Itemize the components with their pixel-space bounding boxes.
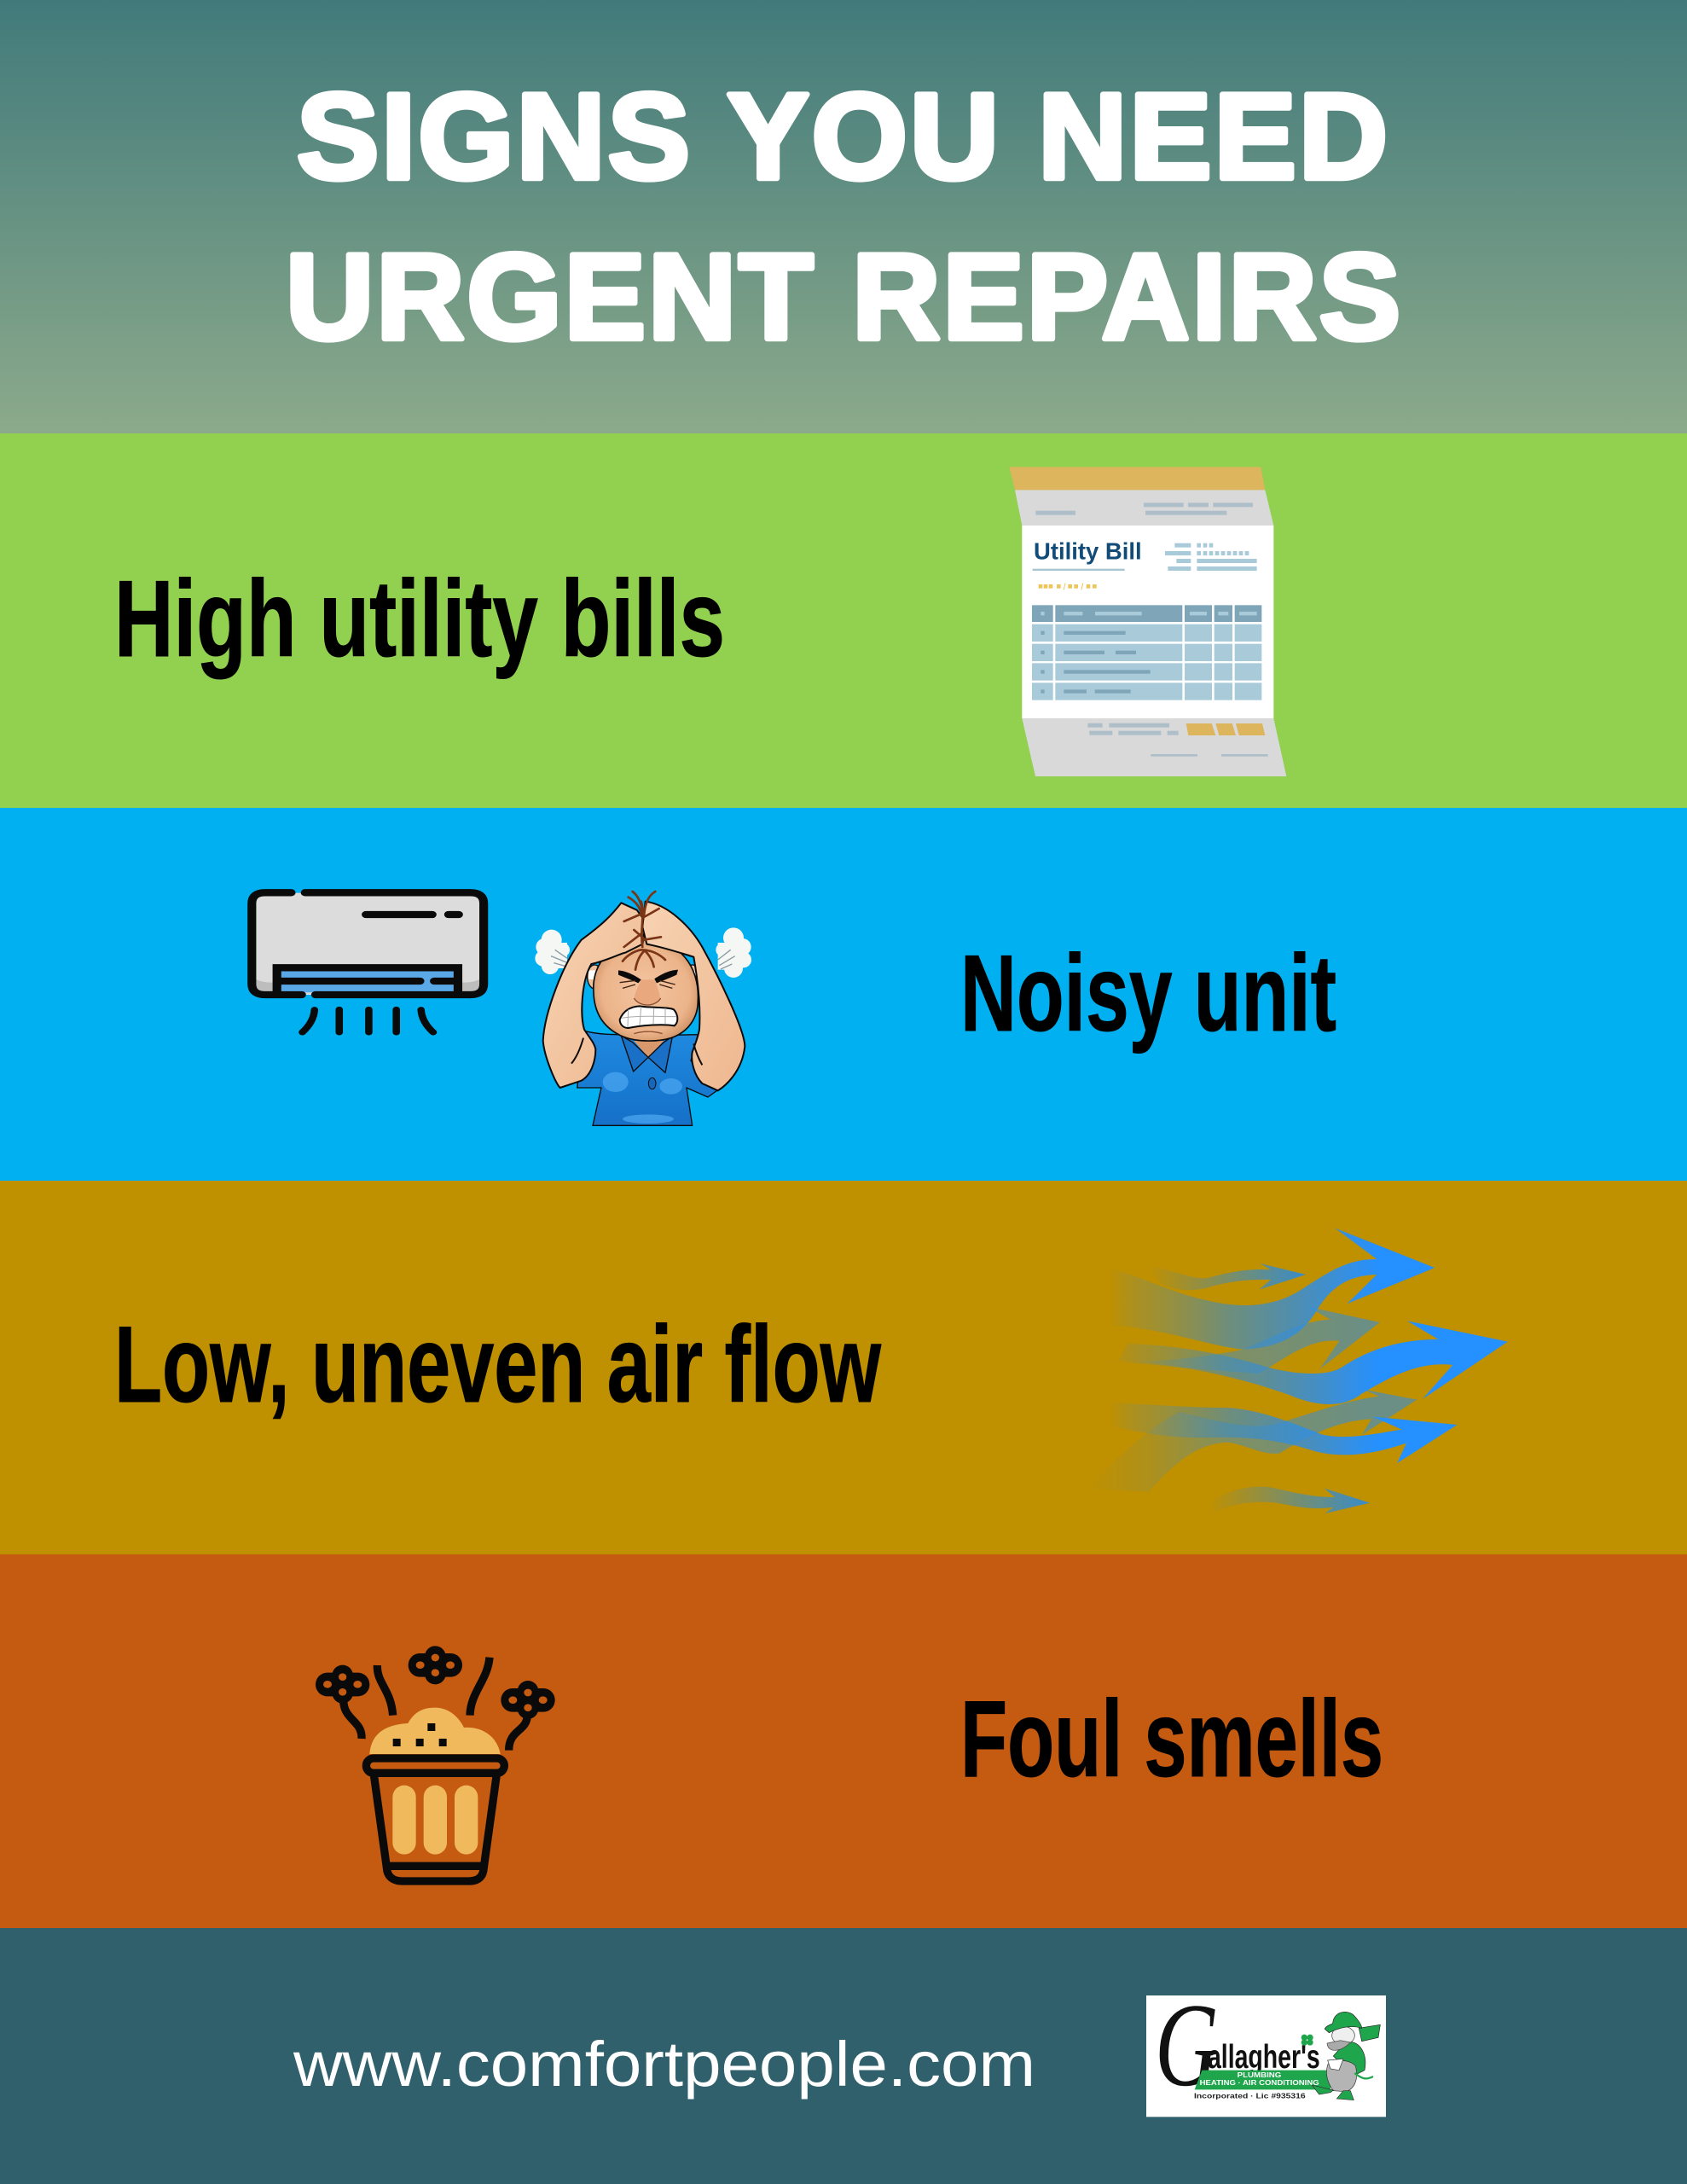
logo: Gallagher's: PLUMBING: [1238, 2071, 1281, 2079]
website address: www.comfortpeople.com: [293, 2029, 1035, 2100]
icon: utility bill document: [1009, 467, 1286, 776]
title: SIGNS YOU NEED: [297, 69, 1390, 205]
logo: Gallagher's: Incorporated · Lic #935316: [1194, 2092, 1306, 2100]
heading: low uneven air flow: Low, uneven air flow: [114, 1304, 882, 1425]
heading: high utility bills: High utility bills: [114, 558, 725, 679]
panel: foul smells: [0, 1554, 1687, 1928]
icon: smelly trash can: [316, 1646, 555, 1881]
icon: frustrated man covering ears: [535, 892, 751, 1125]
icon: utility bill document: Utility Bill: [1034, 538, 1142, 565]
logo: Gallagher's: allagher's: [1208, 2038, 1320, 2076]
panel: low uneven air flow: [0, 1181, 1687, 1554]
heading: foul smells: Foul smells: [960, 1678, 1383, 1799]
panel: noisy unit: [0, 808, 1687, 1181]
heading: noisy unit: Noisy unit: [960, 932, 1336, 1054]
panel: header: [0, 0, 1687, 433]
logo: Gallagher's: HEATING · AIR CONDITIONING: [1200, 2079, 1319, 2087]
title: URGENT REPAIRS: [286, 229, 1403, 365]
panel: high utility bills: [0, 433, 1687, 808]
panel: footer: [0, 1928, 1687, 2184]
logo: Gallagher's: [1146, 1979, 1386, 2117]
icon: odour puffs: [316, 1646, 555, 1719]
icon: air flow arrows: [1088, 1228, 1508, 1514]
icon: air conditioner: [252, 892, 484, 1032]
title: [286, 69, 1403, 365]
logo: Gallagher's: G: [1155, 1979, 1219, 2111]
